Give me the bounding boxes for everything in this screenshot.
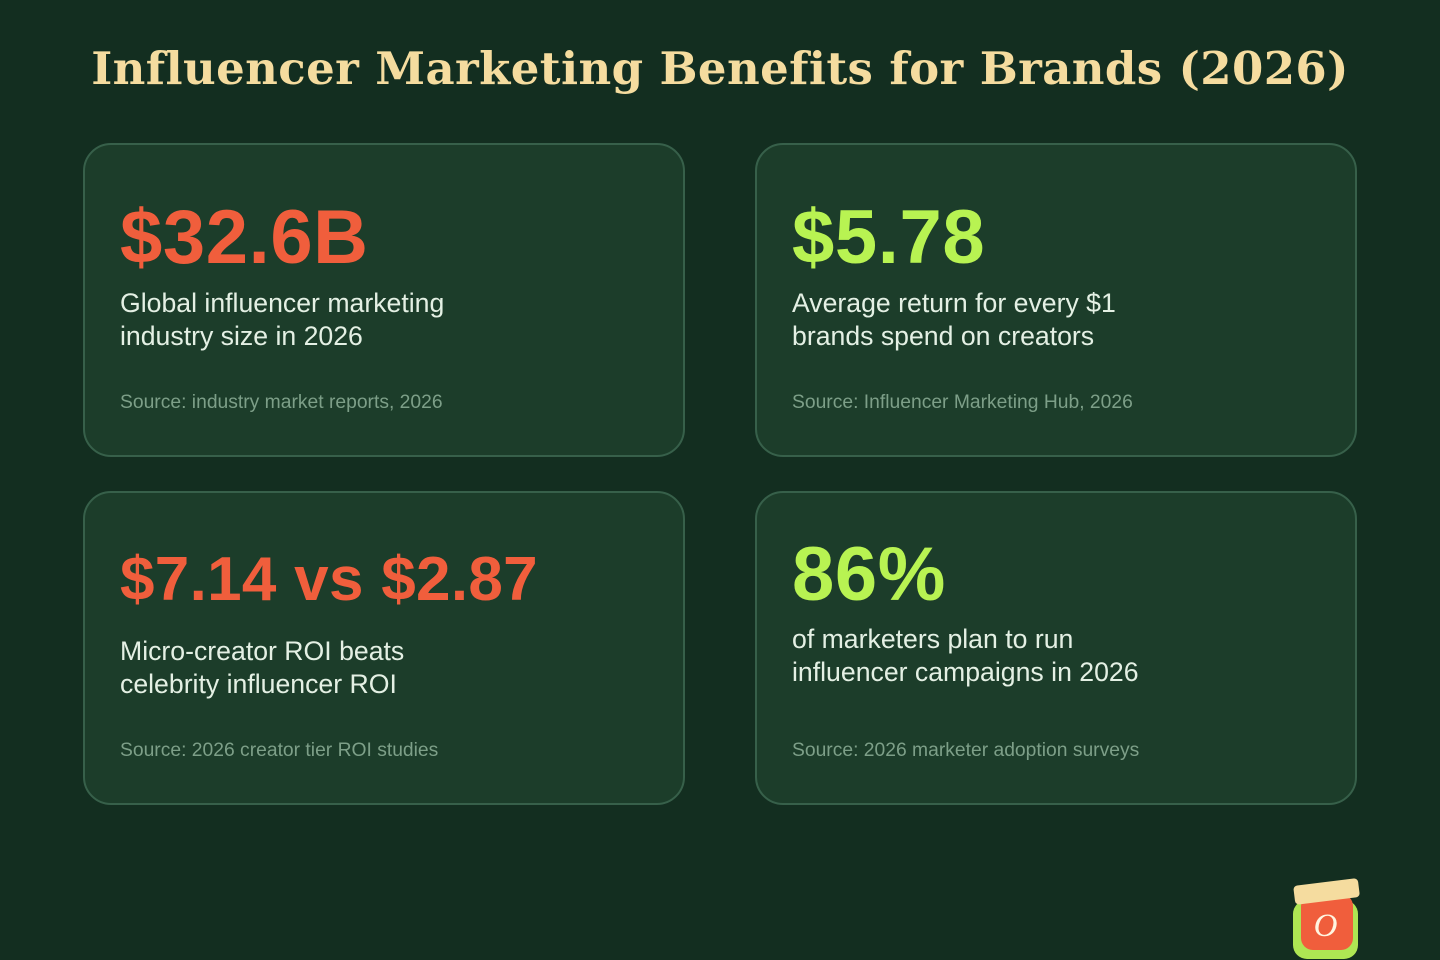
panel: industry size bbox=[83, 143, 685, 457]
description: industry size bbox=[120, 288, 444, 351]
description: marketer adoption bbox=[792, 624, 1139, 687]
icon: jar logo bbox=[1293, 878, 1360, 959]
stat: $5.78: $5.78 bbox=[792, 195, 985, 280]
description: industry size: industry size in 2026 bbox=[120, 321, 363, 351]
icon: jar logo: O bbox=[1314, 908, 1338, 944]
description: marketer adoption: of marketers plan to run bbox=[792, 624, 1073, 654]
source: creator tier studies: Source: 2026 creator tier ROI studies bbox=[120, 740, 438, 761]
source: adoption surveys: Source: 2026 marketer adoption surveys bbox=[792, 740, 1139, 761]
source: Influencer Marketing Hub: Source: Influencer Marketing Hub, 2026 bbox=[792, 392, 1133, 413]
description: marketer adoption: influencer campaigns in 2026 bbox=[792, 657, 1139, 687]
description: micro-creator ROI: celebrity influencer ROI bbox=[120, 669, 397, 699]
panel: micro-creator ROI bbox=[83, 491, 685, 805]
description: industry size: Global influencer marketing bbox=[120, 288, 444, 318]
description: micro-creator ROI bbox=[120, 636, 404, 699]
stat: $7.14 vs $2.87: $7.14 vs $2.87 bbox=[120, 545, 538, 614]
title: Influencer Marketing Benefits for Brands (2026) bbox=[91, 42, 1349, 95]
panel: marketer adoption bbox=[755, 491, 1357, 805]
description: average return: brands spend on creators bbox=[792, 321, 1094, 351]
description: micro-creator ROI: Micro-creator ROI beats bbox=[120, 636, 404, 666]
source: market reports: Source: industry market reports, 2026 bbox=[120, 392, 443, 413]
description: average return bbox=[792, 288, 1116, 351]
stat: 86%: 86% bbox=[792, 532, 946, 617]
description: average return: Average return for every $1 bbox=[792, 288, 1116, 318]
panel: average return bbox=[755, 143, 1357, 457]
stat: $32.6B: $32.6B bbox=[120, 195, 369, 280]
